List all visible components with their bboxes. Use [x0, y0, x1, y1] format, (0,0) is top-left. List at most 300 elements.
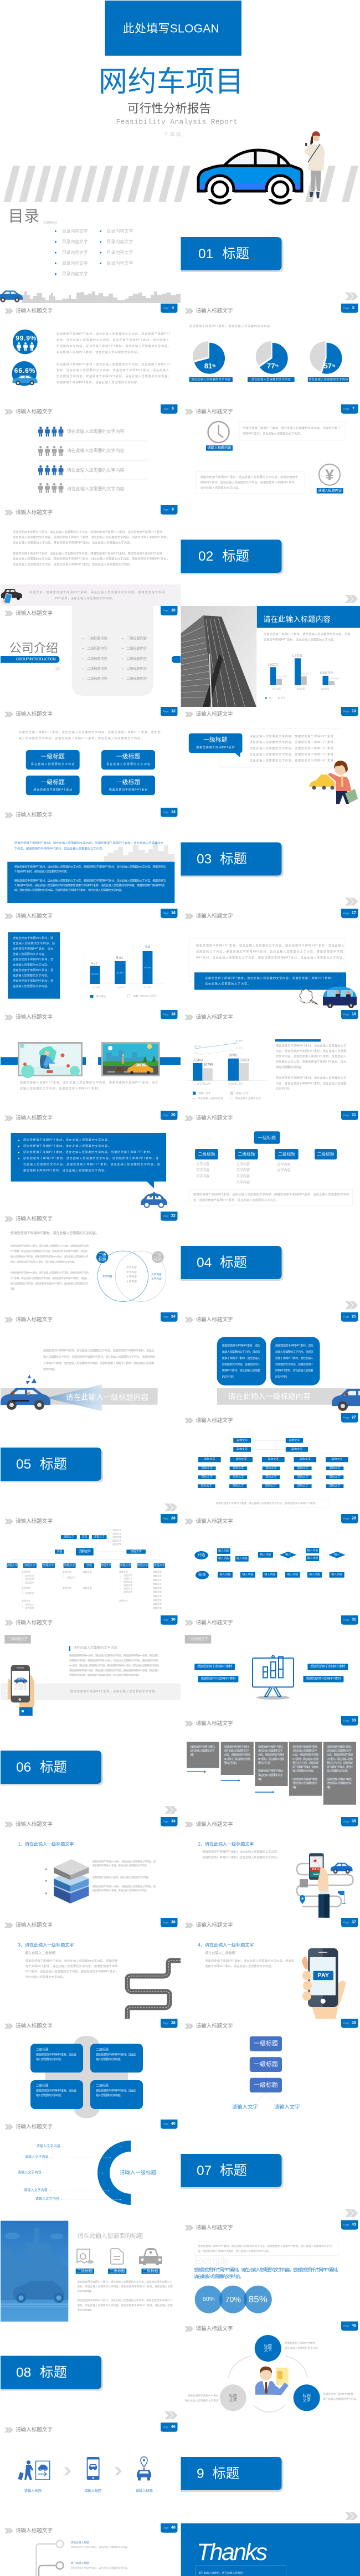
card 4: 感谢您使用千库网PPT素材，请在此: [96, 2088, 136, 2092]
bar chart: 23.9%: [91, 973, 99, 976]
slide 32: section 06: [1, 1751, 177, 1814]
pie: 57%: 57%: [323, 362, 336, 370]
header: [4, 1615, 177, 1626]
right note: 请在此输入您需要的文字内容。: [323, 2397, 358, 2401]
box 3: [255, 1742, 288, 1786]
header: [185, 1111, 358, 1121]
caption: [20, 1081, 158, 1091]
header: Page: [343, 1517, 349, 1520]
process boxes row 2: 输入功能: [219, 1573, 231, 1577]
blue box: 请在此输入您需要的文字内容。: [205, 982, 250, 986]
signal triangles: [26, 1374, 37, 1384]
header: Page: [163, 710, 169, 712]
flow top boxes: 流程文字: [63, 1535, 74, 1539]
text block: 的文字内容。: [43, 1368, 57, 1372]
slide 4: [4, 304, 177, 386]
description: 您使用千库网PPT素材，请在此输入您需要的文字内容。: [264, 638, 337, 642]
paragraph 1: 请在此输入您需要的文字内容。感谢您使用千库网PPT素材，请在此输入您需要的文字内容。: [13, 541, 133, 545]
flow sub-items: 流程文字: [67, 1576, 76, 1579]
header: Page: [163, 2022, 169, 2024]
description: 感谢您使用千库网PPT素材，请在此输入您需要的文字内容。: [202, 1855, 280, 1859]
box 1: 感谢您使用千库网PPT素材，: [190, 1745, 217, 1749]
header: Page: [163, 1315, 169, 1318]
header: 33: [352, 1718, 356, 1723]
catalog english label: Catalog: [43, 220, 56, 225]
text block: 感谢您使用千库网PPT素材，请在此输入您需要的文字内容。感谢您使用千库网PPT素材，请在此输入: [69, 1669, 160, 1672]
icon: map: [300, 1879, 308, 1887]
slide 34: [4, 1817, 177, 1903]
header: [4, 304, 177, 314]
description: [264, 632, 350, 642]
header: 请输入标题文字: [196, 1417, 233, 1424]
bar chart: revenue: 2017年: [296, 687, 305, 691]
org boxes top: 架构文字: [236, 1447, 248, 1451]
flow sub-items: 流程文字: [22, 1570, 30, 1573]
org boxes level 4: 架构文字: [233, 1466, 244, 1470]
flow top boxes: 流程文字: [94, 1535, 105, 1539]
callout: [189, 733, 243, 757]
header: 4: [172, 306, 174, 310]
flow sub-items: 流程文字: [153, 1582, 162, 1585]
end node: 结束: [198, 1572, 206, 1577]
timeline text 1: 感谢您使用千库网PPT素材，请在此输入您需要的文字内容。: [71, 2545, 130, 2549]
header: Page: [343, 2224, 349, 2226]
top node: [255, 2335, 281, 2362]
text column: 此输入您需要的文字内容。: [276, 1065, 304, 1069]
header: 6: [172, 407, 174, 411]
blue text panel: 感谢您使用千库网PPT素材，请: [13, 979, 53, 983]
slide 3: section 01: [181, 237, 358, 300]
flow side list: 流程文字: [112, 1528, 121, 1531]
level-2 items: 文字内容: [236, 1162, 250, 1166]
org boxes level 5: 架构文字: [329, 1475, 341, 1479]
text block: 您需要的文字内容。感谢您使用千库网PPT素材，请在此输入您需要的文字内容。: [69, 1673, 141, 1677]
paragraph 2: 您需要的文字内容。欢迎使用千库网PPT素材，请在此输入您需要的文字内容。: [56, 374, 171, 378]
box 4: 要的文字内容。感谢您使: [292, 1761, 318, 1765]
text block: PPT素材，请在此输入您需要的文字内容。感谢您使用千库网PPT素材，请在此输入您需要的文字内容。: [69, 1664, 161, 1667]
branch labels: 请输入文字: [274, 2104, 300, 2110]
header: 请输入标题文字: [196, 1720, 233, 1727]
combo chart: 2018年12月: [228, 1082, 243, 1086]
box 5: [323, 1742, 356, 1805]
process boxes row 1: 输入功能: [307, 1556, 318, 1560]
header: 10: [171, 608, 176, 613]
header: 27: [352, 1416, 356, 1419]
icon: taxi: [141, 1192, 167, 1208]
level-2 boxes: 二级标题: [238, 1151, 255, 1157]
blue speech bubble: 谢您使用千库网PPT素材，请在此输入您需要的文字内容。: [23, 1168, 107, 1172]
badge: 99.9%: 99.9%: [16, 335, 37, 342]
layer text: 感谢您使用千库网PPT素材，请在此输入您需要的文字内容。感: [92, 1885, 156, 1889]
level-2 boxes: [195, 1149, 337, 1159]
header: 请输入标题文字: [16, 1922, 53, 1928]
row 1 blue people: 请在此输入您需要的文字内容: [67, 429, 124, 434]
level-2 items: 文字内容: [236, 1168, 250, 1172]
header: Page: [163, 1517, 169, 1520]
bottom strip: 标题文字：感谢您使用千库网PPT素材，请在此输入您需要的文字内容。感谢您使用千库网: [29, 591, 164, 594]
header: [4, 2523, 177, 2534]
timeline text 2: 请在此输入标题: [71, 2561, 89, 2565]
flow side list: [112, 1528, 121, 1546]
bar chart: revenue: [265, 653, 344, 699]
level-2 items: 文字内容: [277, 1168, 290, 1173]
header: Page: [343, 1820, 349, 1823]
card 1: 请在此输入您需要的文字内容: [31, 762, 75, 766]
icon tags: 二级标题: [110, 2268, 125, 2274]
header: [185, 1413, 358, 1424]
box 5: 输入您需要的文字内容。: [327, 1769, 350, 1773]
box 3: PPT素材，请在此输入您需: [258, 1757, 284, 1761]
text box 2: 库网PPT素材，请在此输入您需要的文字内容。感谢您使用千库网PPT素材，: [200, 481, 297, 485]
box 2: [221, 1742, 254, 1775]
blue speech bubble: 感谢您使用千库网PPT素材，请在此输入您需要的文字内容。: [23, 1138, 111, 1142]
blue labels: 感谢您使用千库网PPT素材: [310, 1664, 345, 1669]
flow sub-items: 流程文字: [119, 1570, 128, 1573]
panel list: 二级标题内容: [87, 635, 107, 640]
card 1: 二级标题: [36, 2048, 49, 2052]
text box 1: 库网PPT素材，请在此输入您需要的文字内容。: [243, 432, 303, 435]
text box: 请在此输入您需要的文字内容。感谢您使用千库网PPT素材，: [250, 753, 337, 757]
catalog list: 目录内容文字: [106, 239, 133, 244]
header: 请输入标题文字: [16, 711, 53, 717]
bottom strip: [1, 584, 181, 606]
percent circles: [195, 2286, 272, 2313]
left note: [184, 2394, 219, 2403]
blue text panel: 此输入您需要的文字内容。: [13, 952, 47, 956]
subheading: 请在此输入二级标题: [205, 1951, 235, 1956]
blue labels: 感谢您使用千库网PPT素材: [200, 1676, 236, 1681]
blue panel: 感谢您使用千库网PPT素材，请在此输入您需要的文字内容。感谢您使用千库网PPT素材，请在此输入您需要的文字内容。感谢您使用: [14, 865, 166, 869]
flow sub-items: 流程文字: [25, 1591, 34, 1594]
box 3: 感谢您使用千库网PPT素材，: [258, 1745, 285, 1749]
left text: PPT素材，请在此输入您需要的文字内容。感谢您使用千库网PPT素材，请在此: [11, 1276, 88, 1280]
text box: [189, 1189, 353, 1206]
header: 请输入标题文字: [16, 307, 53, 314]
card right: 使用千库网PPT素材，请在此输入: [275, 1356, 313, 1360]
flow row of boxes: 流程文字: [24, 1563, 35, 1567]
text box 1: 感谢您使用千库网PPT素材，请在此输入您需要的文字内容。感谢您使用千: [243, 426, 341, 430]
header: Page: [163, 1619, 169, 1621]
combo chart: 请输入文字: [236, 1091, 249, 1095]
combo chart: 请在此输入主要的内容: [235, 1096, 261, 1100]
illustration: blue city and car: [1, 2221, 68, 2322]
layer text: 感谢您使用千库网PPT素材，请在此输入您需要的文字内容。: [92, 1876, 151, 1879]
process boxes row 2: 输入功能: [242, 1573, 253, 1577]
half ring: [97, 2141, 131, 2205]
blue text panel: 在此输入您需要的文字内容。感: [13, 942, 55, 946]
catalog list: 目录内容文字: [62, 249, 88, 255]
icon tags: 二级标题: [143, 2268, 158, 2274]
slide 26: section 05: 标题: [40, 1456, 67, 1472]
flow side list: 流程文字: [112, 1535, 121, 1538]
header: 请输入标题文字: [16, 1014, 53, 1020]
box 5: 内容。: [327, 1785, 332, 1789]
card 2: 二级标题: [96, 2048, 109, 2052]
text: [25, 1959, 119, 1979]
illustration: phone in hand: 努力赶来: [14, 1686, 27, 1691]
timeline text 2: 感谢您使用千库网PPT素材，请在此输入您需要的文字内容。: [71, 2566, 130, 2570]
flow center row: 流程文字: [79, 1549, 91, 1553]
process boxes row 2: [218, 1572, 344, 1578]
row 3 blue people: 请在此输入您需要的文字内容: [67, 468, 124, 473]
caption: 感谢您使用千库网PPT素材，请在此输入您需要的文字内容。感谢您使用千库网PPT素材，请在: [20, 1081, 158, 1085]
left text: PPT素材，请在此输入您需要的文字内容。感谢您使用千库网PPT素材，请在此: [11, 1249, 88, 1253]
org boxes level 6: 架构文字: [329, 1484, 341, 1488]
heading: 2、请在此输入一级标题文字: [198, 1841, 254, 1847]
slide 20: [4, 1111, 177, 1208]
blue labels: 感谢您使用千库网PPT素材: [197, 1664, 232, 1669]
bar chart: revenue: 1.8亿元: [292, 653, 303, 658]
org boxes level 5: 架构文字: [265, 1475, 277, 1479]
box 5: 要的文字内容。感谢您使: [327, 1761, 353, 1765]
header: [185, 2321, 358, 2332]
pie labels: 请在此输入您需要的文字内容: [308, 377, 348, 381]
slide 5: [185, 304, 358, 382]
pie labels: 请在此输入您需要的文字内容: [191, 377, 230, 381]
header: Page: [163, 2425, 169, 2429]
bottom strip: PPT素材，请在此输入您需要的文字内容。: [55, 597, 115, 601]
box 3: 感谢您使用千库网PPT素材，: [258, 1769, 285, 1773]
flow sub-items: 流程文字: [124, 1583, 132, 1587]
level-2 items: 文字内容: [196, 1174, 209, 1178]
gray tag: 二级标题文字: [188, 1636, 208, 1641]
org boxes level 3: 架构文字: [268, 1458, 279, 1461]
outlined text box: [189, 938, 346, 982]
card left: 您需要的文字内容。感谢您使用千: [222, 1362, 260, 1366]
text box 2: 请在此输入您需要的文字内容。: [200, 486, 241, 490]
header: [4, 808, 177, 818]
text box: 容。感谢您使用千库网PPT素材，请在此输入您需要的文字内容。: [193, 1198, 279, 1202]
blue speech bubble: 感谢您使用千库网PPT素材，请在此输入您需要的文字内容。: [23, 1144, 111, 1148]
header: [185, 2220, 358, 2231]
blue labels: [194, 1664, 348, 1682]
bar chart: revenue: 8000万元: [320, 671, 333, 675]
paragraph 1: 请在此输入您需要的文字内容。感谢您使用千库网PPT素材，请在此输入您需要的文字内容。感谢您使用千库网PPT素材，: [13, 536, 169, 540]
text box 1: [239, 422, 346, 440]
catalog list: [55, 228, 133, 276]
flow sub-items: 流程文字: [124, 1587, 132, 1590]
paragraph 1: 感谢您使用千库网PPT素材，请在此输入您需要的文字内容。感谢您使用千库网PPT素材，感谢您使用千库网PPT素材，: [13, 530, 165, 534]
paragraph 2: 感谢您使用千库网PPT素材，请在此输入您需要的文字内容。感谢您使用千库网PPT素材，感谢您使用千库网PPT素材，: [13, 552, 165, 556]
text: [205, 1959, 294, 1968]
icon: car front: [139, 2248, 162, 2265]
header: [4, 2423, 177, 2433]
gray band with title: [1, 1384, 158, 1411]
bar chart: [85, 945, 164, 998]
combo chart: 27%: [194, 1052, 199, 1055]
gray tag: [185, 1635, 211, 1644]
slide 49: thanks: [181, 2523, 360, 2576]
combo chart: 请在此输入主要的内容: [198, 1096, 224, 1100]
level-2 boxes: 二级标题: [317, 1151, 335, 1157]
blue statement: [194, 2267, 341, 2279]
flow sub-items: 流程文字: [22, 1586, 30, 1589]
left text: 感谢您使用千库网PPT素材，请在此输入您需要的文字内容。感谢您使用千库网: [11, 1271, 89, 1275]
main title: 网约车项目: [99, 66, 244, 98]
slide 33: staircase boxes: [185, 1716, 358, 1805]
blue panel: 感谢您使用千库网PPT素材，请在此输入您需要的文字内容。感谢您使用千库网PPT素材，请在此输入您需要的文字内容。感谢您使用: [14, 879, 166, 883]
header: [185, 1716, 358, 1727]
header: Page: [343, 307, 349, 309]
blue statement: 感谢您使用千库网PPT素材，请在此输入您需要的文字内容。感谢您使用千库网PPT素材，: [194, 2267, 341, 2272]
process boxes row 1: [217, 1548, 346, 1562]
bar chart: 2018年: [143, 986, 152, 989]
header: Page: [163, 408, 169, 410]
header: 请输入标题文字: [196, 1115, 233, 1121]
header: [4, 1212, 177, 1222]
blue speech bubble: 感谢您使用千库网PPT素材，请在此输入您需要的文字内容。感谢您使用千库网PPT素材，请: [23, 1156, 158, 1160]
isometric layers: [54, 1859, 89, 1903]
top node: 文字: [264, 2348, 272, 2352]
note box: [213, 1500, 330, 1507]
box 4: 内容。: [292, 1785, 297, 1789]
blue background: [181, 2523, 360, 2576]
intro text: 感谢您使用千库网PPT素材，请在此输入您需要的文字内容。感谢您使用千库网PPT素材，请在此: [19, 731, 161, 735]
left text: 内容。感谢您使用千库网PPT素材，请在此输入您需要的文字内容。: [11, 1260, 76, 1264]
example watermark: Example: [194, 2255, 229, 2266]
header: Page: [163, 1214, 169, 1218]
stacked titles: 一级标题: [254, 2081, 278, 2088]
header: Page: [343, 710, 349, 712]
description: 感谢您使用千库网PPT素材，请在此输入您需要的文字内容。: [202, 1850, 280, 1854]
text block: 您需要的文字内容。感谢您使用千库网PPT素材，请在此输入您需要的文字内容。感谢您使用千库网: [69, 1659, 158, 1662]
header: Page: [163, 1113, 169, 1117]
panel list: [83, 635, 147, 681]
header: Page: [343, 2324, 349, 2327]
icon: small blue car: [0, 291, 23, 302]
flow row of boxes: 流程文字: [7, 1563, 18, 1567]
subheading: [69, 1646, 117, 1651]
card 4: [101, 776, 155, 795]
card 2: 输入您需要的文字内容。: [96, 2057, 123, 2061]
text box: 请在此输入您需要的文字内容。感谢您使用千库网PPT素材，: [250, 758, 337, 762]
text block: 千库网PPT素材，请在此输入您需要的文字内容。感谢您使用千库网PPT素材，请在此输入您需要: [43, 1361, 154, 1365]
text column: 感谢您使用千库网PPT素材，请在此输入您需要的文字: [276, 1044, 346, 1048]
blue text panel: 感谢您使用千库网PPT素材，请: [13, 968, 53, 972]
panel list: 二级标题内容: [126, 656, 147, 661]
left node: 文字: [229, 2398, 237, 2403]
org boxes level 5: 架构文字: [233, 1475, 244, 1479]
box 3: 要的文字内容。: [258, 1761, 272, 1765]
panel list: 二级标题内容: [126, 666, 147, 671]
left node: 标题: [229, 2393, 237, 2398]
card 1: 一级标题: [40, 752, 65, 760]
icon: yuan coin: ¥: [325, 466, 334, 483]
flow sub-items: 流程文字: [62, 1586, 71, 1589]
slide 24: [1, 1312, 177, 1411]
timeline text 2: [71, 2561, 130, 2570]
blue box: [194, 972, 346, 990]
card 2: [90, 2044, 143, 2072]
left node: [220, 2384, 246, 2411]
intro text: 输入您需要的文字内容。感谢您使用千库网PPT素材，请在此输入您需要的文字内容。: [19, 736, 143, 740]
header: Page: [343, 1720, 349, 1722]
slide 47: section 9: 9: [197, 2466, 204, 2481]
box 3: 请在此输入您需要的文字: [258, 1773, 283, 1777]
header: [4, 2120, 177, 2130]
ring labels: 请输入文字内容: [24, 2188, 48, 2192]
flow sub-items: 流程文字: [25, 1603, 34, 1606]
ring leaders: [43, 2147, 122, 2200]
blue speech bubble: [11, 1133, 166, 1188]
flow sub-items: 流程文字: [153, 1578, 162, 1581]
box 2: 请在此输入您需要的文字: [224, 1749, 249, 1753]
stacked titles: 一级标题: [254, 2039, 278, 2047]
flow side list: 流程文字: [112, 1532, 121, 1535]
slide 42: [1, 2221, 173, 2322]
combo chart: 23623: [239, 1059, 249, 1062]
slide 9: section 02: 02: [198, 549, 213, 564]
header: 请输入标题文字: [16, 509, 53, 516]
tag 1: 请输入标题内容: [207, 445, 232, 450]
branch labels: 请输入文字: [232, 2104, 258, 2110]
header: Page: [163, 811, 169, 813]
panel list: 二级标题内容: [87, 646, 107, 650]
header: 请输入标题文字: [196, 1821, 233, 1828]
blue panel: 千库网PPT素材，请在此输入您需要的文字内容。: [14, 870, 69, 874]
box 1: 请在此输入您需要的文字: [190, 1749, 215, 1753]
blue panel: 材，请在此输入您需要的文字内容。感谢您使用千库网PPT素材，请在此输入您需要的文字内容。: [14, 889, 124, 892]
row 4 gray people: [38, 483, 124, 493]
slide 3: section 01: 标题: [222, 246, 249, 261]
slide 15: section 03: 03: [197, 851, 212, 866]
connectors: [208, 1551, 337, 1575]
org boxes level 3: [198, 1457, 348, 1462]
blue panel: 千库网PPT素材，请在此输入您需要的文字内容感谢您使用千库网PPT素材，请在此输入您需要的文字内容。感谢您使用千库网PPT素: [14, 884, 165, 887]
panel list: 二级标题内容: [126, 676, 147, 681]
card right: 库网PPT素材，请在此输入您需要: [275, 1369, 313, 1373]
box 1: [187, 1742, 219, 1768]
flow sub-items: 流程文字: [153, 1606, 162, 1609]
timeline: [36, 2541, 63, 2576]
text box 2: [196, 471, 305, 494]
photo: skyscraper: [181, 606, 256, 707]
percent circles: 85%: [249, 2294, 268, 2305]
text column: 感谢您使用千库网PPT素材，请在此输入您需要的文字: [276, 1076, 346, 1080]
illustration: hand with booking phone: CALL: [312, 1868, 321, 1871]
header: [4, 1514, 177, 1525]
org boxes top: [233, 1438, 308, 1452]
icon tags: [76, 2268, 160, 2274]
box 4: PPT素材，请在此输入您需: [292, 1757, 318, 1761]
slide 32: section 06: 06: [16, 1760, 31, 1775]
header: Page: [343, 1416, 349, 1419]
header: 请输入标题文字: [196, 2224, 233, 2231]
road stripes: [3, 166, 358, 202]
header: 14: [171, 810, 176, 814]
flow row of boxes: 流程文字: [154, 1563, 165, 1567]
stacked titles: 一级标题: [254, 2060, 278, 2068]
flow row of boxes: 流程文字: [137, 1563, 148, 1567]
card 4: 二级标题: [96, 2084, 109, 2088]
venn diagram: 二级: [154, 1252, 162, 1258]
slide 28: process chart: [4, 1514, 177, 1609]
header: [185, 1010, 358, 1020]
tag 2: [317, 488, 343, 494]
card left: 使用千库网PPT素材，请在此输入: [222, 1356, 260, 1360]
blue text panel: 在此输入您需要的文字内容。: [13, 974, 50, 978]
bar chart: 65.8%: [144, 966, 151, 969]
english subtitle: Feasibility Analysis Report: [116, 117, 238, 126]
combo chart: 22463: [193, 1059, 203, 1062]
org boxes level 4: [198, 1466, 343, 1470]
header: Page: [163, 912, 169, 915]
venn diagram: 二级: [99, 1252, 106, 1258]
header: [185, 1514, 358, 1525]
gray band with title: 请在此输入一级标题内容: [228, 1392, 311, 1400]
flow sub-items: 流程文字: [83, 1570, 92, 1573]
illustration: boy with yellow taxi: [309, 761, 358, 804]
